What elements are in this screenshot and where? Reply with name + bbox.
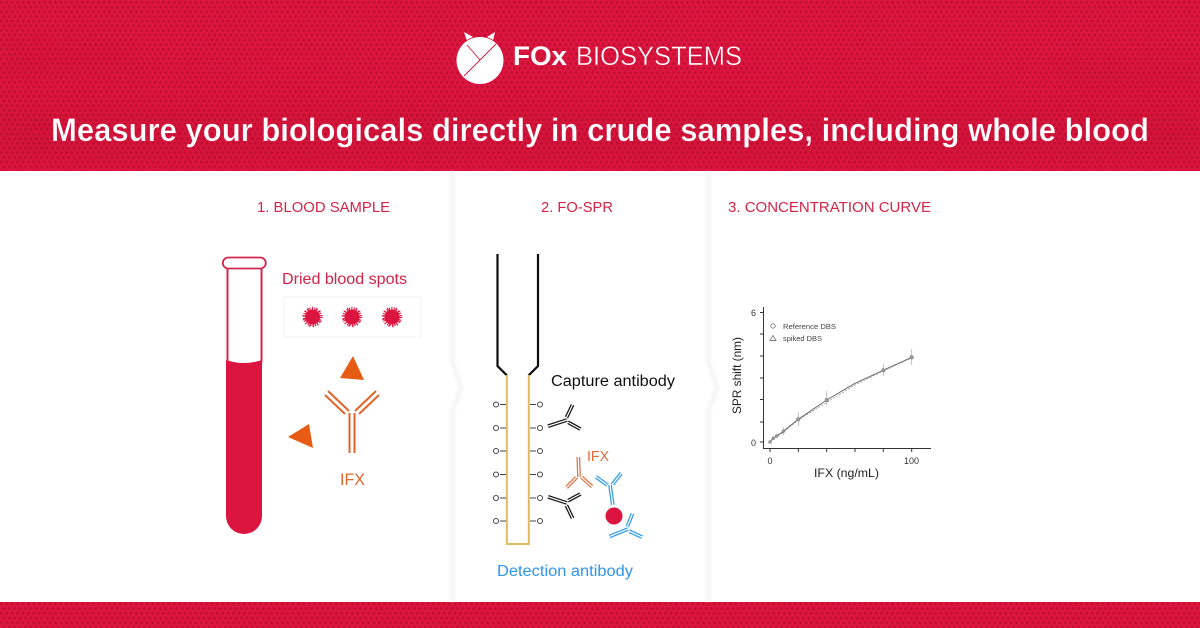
footer band bbox=[0, 602, 1200, 628]
icon: red particle bbox=[606, 508, 622, 524]
title: Measure your biologicals directly in crude samples, including whole blood bbox=[51, 112, 1149, 148]
icon: detection antibody upper bbox=[595, 472, 626, 507]
curves bbox=[770, 349, 912, 442]
brand name: BIOSYSTEMS bbox=[576, 41, 742, 71]
icon: capture antibody upper bbox=[544, 404, 582, 439]
arrow: left to tube bbox=[288, 424, 313, 448]
tick labels: 100 bbox=[904, 456, 919, 466]
logo bbox=[456, 32, 742, 85]
legend bbox=[770, 322, 836, 343]
icon: fiber probe bbox=[494, 254, 542, 544]
icon: capture antibody lower bbox=[544, 484, 582, 519]
label: dried blood spots: Dried blood spots bbox=[282, 271, 407, 288]
tick labels: 6 bbox=[751, 308, 756, 318]
panel: blood sample bbox=[223, 258, 421, 534]
label: IFX bound: IFX bbox=[587, 449, 609, 465]
label: capture antibody: Capture antibody bbox=[551, 373, 675, 390]
tick labels: 0 bbox=[768, 456, 773, 466]
label: IFX: IFX bbox=[340, 470, 365, 489]
header band bbox=[0, 0, 1200, 171]
axes bbox=[760, 307, 931, 452]
brand name bbox=[513, 41, 742, 71]
arrow: up to spots bbox=[340, 356, 364, 380]
tick labels bbox=[751, 308, 919, 466]
heading: concentration curve: 3. CONCENTRATION CURVE bbox=[728, 199, 931, 216]
legend: Reference DBS bbox=[783, 322, 836, 331]
brand name: FOx bbox=[513, 41, 567, 71]
panel dividers with chevrons bbox=[450, 172, 720, 601]
heading: blood sample: 1. BLOOD SAMPLE bbox=[257, 199, 390, 216]
icon: IFX antibody bbox=[325, 391, 379, 453]
label: detection antibody: Detection antibody bbox=[497, 563, 633, 580]
icon: detection antibody lower bbox=[604, 512, 643, 549]
tick labels: 0 bbox=[751, 438, 756, 448]
panel: FO-SPR bbox=[494, 254, 675, 580]
icon: IFX antibody small bbox=[565, 457, 593, 488]
icon: fox head bbox=[456, 32, 504, 85]
heading: FO-SPR: 2. FO-SPR bbox=[541, 199, 613, 216]
card: dried blood spots bbox=[284, 297, 421, 337]
x axis title: IFX (ng/mL) bbox=[814, 466, 879, 480]
legend: spiked DBS bbox=[783, 334, 822, 343]
y axis title: SPR shift (nm) bbox=[730, 337, 744, 414]
data points bbox=[768, 356, 914, 444]
icon: blood tube bbox=[223, 258, 266, 534]
chart: concentration curve bbox=[730, 307, 931, 480]
